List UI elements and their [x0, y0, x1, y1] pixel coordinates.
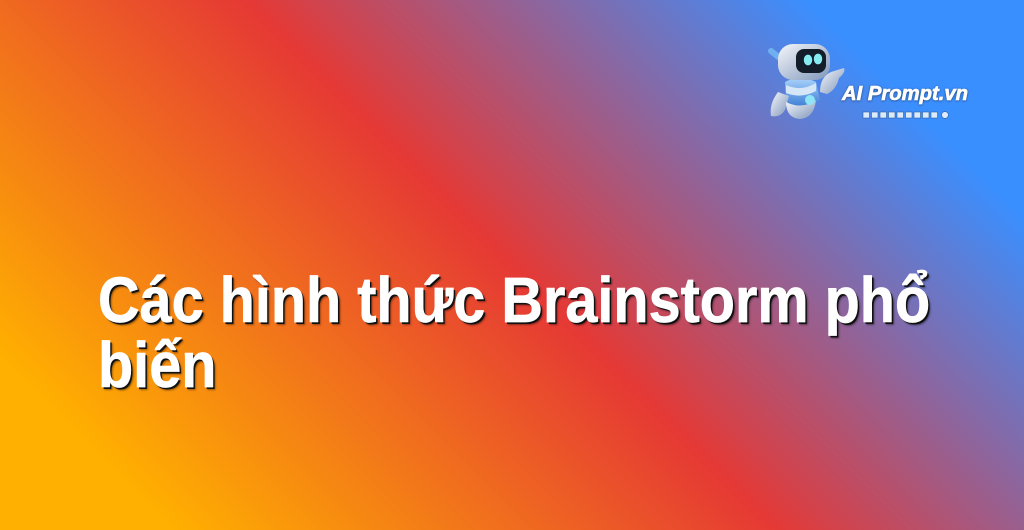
- logo: AI Prompt.vn: [768, 44, 969, 119]
- title: biến: [98, 329, 216, 401]
- icon: robot mascot: [771, 44, 844, 119]
- logo wordmark: AI Prompt.vn: [841, 83, 968, 105]
- title: [98, 264, 932, 401]
- logo tagline badges: [863, 112, 948, 118]
- title: Các hình thức Brainstorm phổ: [98, 264, 930, 336]
